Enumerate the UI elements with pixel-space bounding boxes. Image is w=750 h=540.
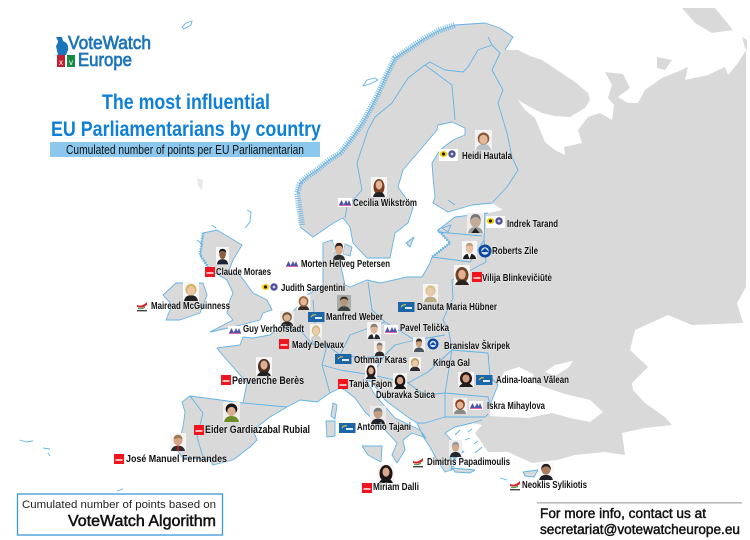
MEP name labels: Indrek Tarand — [507, 219, 558, 230]
logo: ALDE, Morten Helveg Petersen — [285, 259, 299, 268]
MEP name labels: Neoklis Sylikiotis — [522, 480, 587, 491]
contact info — [537, 502, 742, 537]
MEP name labels: Iskra Mihaylova — [487, 401, 545, 412]
title: EU Parliamentarians by country — [51, 118, 321, 141]
portrait: Judith Sargentini — [297, 295, 310, 310]
MEP name labels: Dimitris Papadimoulis — [427, 457, 510, 468]
logo: ALDE, Cecilia Wikström — [338, 198, 352, 207]
logo: ECR, Roberts Zile — [478, 244, 492, 258]
MEP name labels: Adina-Ioana Vălean — [496, 375, 569, 386]
logo: EPP, Adina-Ioana Vălean — [476, 375, 492, 385]
MEP name labels: Kinga Gal — [433, 358, 470, 369]
icon: voter figure — [56, 37, 68, 55]
MEP name labels: José Manuel Fernandes — [126, 453, 227, 465]
portrait: Kinga Gal — [409, 357, 421, 371]
algorithm note box: VoteWatch Algorithm — [68, 513, 216, 530]
MEP name labels: Antonio Tajani — [357, 422, 411, 433]
portrait: Danuta Maria Hübner — [423, 284, 438, 302]
portrait: Dimitris Papadimoulis — [449, 440, 462, 457]
MEP name labels: Dubravka Šuica — [376, 388, 435, 401]
MEP name labels: Manfred Weber — [326, 312, 383, 323]
portrait: Pervenche Berès — [256, 357, 272, 376]
logo: S&D, Claude Moraes — [205, 267, 215, 277]
portrait: Mady Delvaux — [310, 324, 322, 340]
logo wordmark — [68, 33, 151, 70]
logo: S&D, Vilija Blinkevičiūtė — [472, 272, 482, 282]
logo: EPP, Manfred Weber — [308, 312, 324, 322]
MEP name labels: Miriam Dalli — [373, 482, 419, 493]
algorithm note box: Cumulated number of points based on — [22, 499, 216, 511]
title: The most influential — [102, 91, 270, 114]
MEP name labels: Claude Moraes — [216, 267, 271, 278]
MEP name labels: Mairead McGuinness — [151, 301, 230, 312]
title — [51, 91, 321, 141]
portrait: Eider Gardiazabal Rubial — [223, 402, 240, 422]
portrait: Indrek Tarand — [467, 213, 484, 233]
logo: Greens, Indrek Tarand — [486, 216, 505, 228]
MEP name labels: Guy Verhofstadt — [243, 324, 305, 335]
MEP name labels: Eider Gardiazabal Rubial — [205, 424, 310, 436]
portrait: Claude Moraes — [216, 247, 229, 264]
portrait: Morten Helveg Petersen — [332, 242, 346, 260]
logo: S&D, Pervenche Berès — [221, 375, 231, 385]
portrait: Branislav Škripek — [413, 337, 425, 352]
icon: red X box: x — [59, 58, 63, 67]
logo wordmark: VoteWatch — [68, 33, 151, 53]
logo: ALDE, Iskra Mihaylova — [469, 401, 483, 410]
logo: S&D, José Manuel Fernandes — [114, 454, 124, 464]
portrait: Vilija Blinkevičiūtė — [454, 265, 470, 285]
logo: Greens, Judith Sargentini — [261, 282, 280, 294]
portrait: José Manuel Fernandes — [170, 433, 186, 451]
logo: Greens, Heidi Hautala — [439, 149, 458, 161]
contact info: secretariat@votewatcheurope.eu — [540, 522, 740, 537]
logo: GUE/NGL, Dimitris Papadimoulis — [413, 458, 423, 467]
portrait: Iskra Mihaylova — [453, 398, 467, 414]
logo: S&D, Mady Delvaux — [279, 339, 289, 349]
MEP name labels: Branislav Škripek — [444, 339, 510, 352]
portrait: Heidi Hautala — [475, 130, 492, 150]
MEP name labels: Pavel Telička — [400, 323, 449, 334]
portrait: Othmar Karas — [374, 341, 385, 356]
contact info: For more info, contact us at — [540, 506, 706, 521]
portrait: Dubravka Šuica — [393, 373, 407, 389]
party logos — [114, 149, 520, 493]
logo: ALDE, Pavel Telička — [384, 325, 398, 334]
logo: GUE/NGL, Neoklis Sylikiotis — [510, 481, 520, 490]
MEP name labels: Heidi Hautala — [462, 151, 512, 162]
portrait: Antonio Tajani — [370, 406, 386, 424]
logo: S&D, Eider Gardiazabal Rubial — [194, 425, 204, 435]
MEP name labels: Judith Sargentini — [281, 283, 345, 294]
portrait: Manfred Weber — [337, 295, 351, 311]
icon: green check box: v — [69, 58, 73, 67]
portrait: Tanja Fajon — [365, 364, 377, 379]
MEP name labels: Pervenche Berès — [232, 375, 304, 387]
logo wordmark: Europe — [78, 50, 132, 70]
logo: GUE/NGL, Mairead McGuinness — [137, 302, 147, 311]
logo: EPP, Antonio Tajani — [339, 423, 356, 433]
MEP name labels: Danuta Maria Hübner — [417, 302, 497, 313]
MEP name labels: Mady Delvaux — [292, 340, 344, 351]
logo: VoteWatch Europe — [56, 33, 151, 70]
portrait: Mairead McGuinness — [183, 282, 199, 301]
portrait: Miriam Dalli — [378, 464, 394, 483]
coasts and EU borders — [20, 21, 538, 491]
islands — [163, 8, 747, 477]
portrait: Neoklis Sylikiotis — [538, 463, 554, 480]
MEP name labels: Vilija Blinkevičiūtė — [482, 273, 552, 284]
MEP name labels — [126, 151, 587, 493]
MEP name labels: Othmar Karas — [354, 355, 407, 366]
portrait: Adina-Ioana Vălean — [458, 372, 474, 387]
portrait: Roberts Zile — [462, 241, 477, 259]
MEP name labels: Cecilia Wikström — [353, 198, 417, 209]
logo: S&D, Tanja Fajon — [338, 379, 348, 389]
portrait: Guy Verhofstadt — [280, 311, 294, 326]
logo: EPP, Danuta Maria Hübner — [398, 302, 414, 312]
portrait: Pavel Telička — [367, 322, 381, 339]
subtitle bar: Cumulated number of points per EU Parliamentarian — [66, 143, 304, 157]
MEP name labels: Tanja Fajon — [349, 379, 392, 390]
portrait: Cecilia Wikström — [371, 177, 387, 197]
portraits — [170, 130, 554, 483]
MEP name labels: Roberts Zile — [492, 246, 538, 257]
algorithm note box — [18, 494, 222, 535]
logo: EPP, Othmar Karas — [335, 354, 352, 364]
logo: ALDE, Guy Verhofstadt — [228, 326, 242, 335]
MEP name labels: Morten Helveg Petersen — [301, 259, 390, 270]
logo: ECR, Branislav Škripek — [428, 338, 438, 350]
logo: S&D, Miriam Dalli — [362, 483, 372, 493]
